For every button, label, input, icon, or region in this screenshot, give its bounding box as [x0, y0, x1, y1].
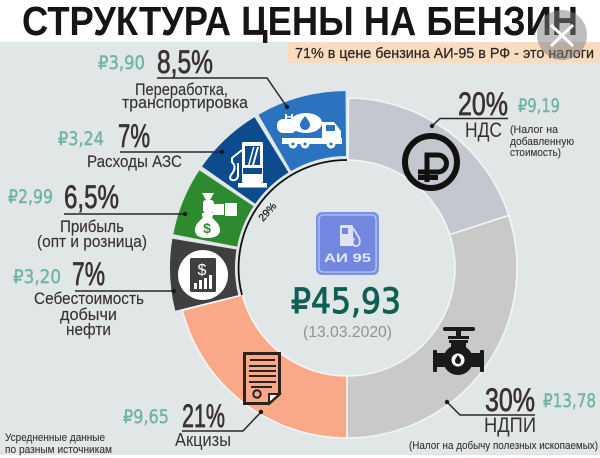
callout: себестоимость: добычи [60, 305, 117, 324]
icon: rouble coin [405, 136, 457, 188]
source note: по разным источникам [5, 444, 112, 456]
callout: акцизы [123, 398, 263, 450]
callout: переработка: транспортировка [122, 93, 248, 112]
icon: pipeline valve [433, 327, 484, 375]
icon: money bag and hand [195, 193, 237, 238]
callout: расходы АЗС: 7% [118, 118, 150, 154]
icon: fuel pump [230, 142, 267, 188]
subtitle banner: 71% в цене бензина АИ-95 в РФ - это налоги [295, 45, 594, 62]
icon: money bag and hand: $ [203, 220, 211, 236]
callout: переработка: ₽3,90 [98, 52, 145, 74]
callout: себестоимость: ₽3,20 [13, 266, 61, 288]
callout: НДС [430, 86, 574, 159]
callout: НДС: НДС [465, 119, 502, 142]
callout: НДС: (Налог на [510, 124, 559, 136]
segment: переработка 8,5% [258, 91, 346, 171]
callout: себестоимость: 7% [72, 256, 105, 292]
source note: Усредненные данные [5, 432, 105, 444]
callout: НДПИ [409, 382, 598, 452]
callout: расходы АЗС: Расходы АЗС [87, 152, 182, 171]
callout: переработка: 8,5% [157, 44, 213, 80]
29% arc bracket: 29% [256, 200, 279, 224]
segment: акцизы 21% [182, 295, 347, 438]
segment: НДПИ 30% [347, 216, 517, 438]
callout: прибыль: (опт и розница) [37, 232, 147, 251]
callout: акцизы: ₽9,65 [123, 406, 169, 428]
segment: НДС 20% [348, 98, 509, 235]
callout: акцизы: 21% [182, 398, 225, 434]
icon: document [244, 354, 280, 404]
29% arc bracket [239, 160, 347, 295]
callout: НДС: 20% [458, 86, 508, 122]
callout: переработка: Переработка, [135, 80, 228, 99]
icon: fuel truck [277, 113, 342, 148]
callout: прибыль: 6,5% [64, 179, 119, 215]
source note [5, 432, 112, 456]
callout: прибыль [8, 179, 187, 251]
center price: ₽45,93 [291, 282, 401, 322]
callout: прибыль: ₽2,99 [8, 186, 53, 208]
segment: расходы АЗС 7% [202, 117, 288, 204]
callout: прибыль: Прибыль [60, 217, 124, 236]
center fuel badge: АИ 95 [324, 251, 371, 265]
price date: (13.03.2020) [303, 324, 392, 341]
callout: НДС: ₽9,19 [518, 95, 560, 117]
callout: НДС: добавленную [510, 136, 574, 148]
callout: НДПИ: НДПИ [484, 414, 536, 437]
donut chart [170, 91, 517, 438]
callout: переработка [98, 44, 289, 112]
callout: расходы АЗС [58, 118, 224, 171]
segment: себестоимость 7% [170, 239, 238, 311]
callout: себестоимость [13, 256, 176, 339]
close button overlay [537, 10, 587, 60]
callout: НДПИ: 30% [485, 382, 535, 418]
callout: себестоимость: Себестоимость [34, 289, 144, 308]
callout: себестоимость: нефти [66, 320, 111, 339]
icon: cost report: $ [198, 262, 207, 279]
callout: расходы АЗС: ₽3,24 [58, 128, 104, 150]
center fuel badge [316, 212, 379, 275]
callout: НДС: стоимость) [510, 147, 561, 159]
segment: прибыль 6,5% [173, 170, 254, 247]
callout: акцизы: Акцизы [175, 430, 231, 450]
icon: cost report [178, 250, 228, 300]
